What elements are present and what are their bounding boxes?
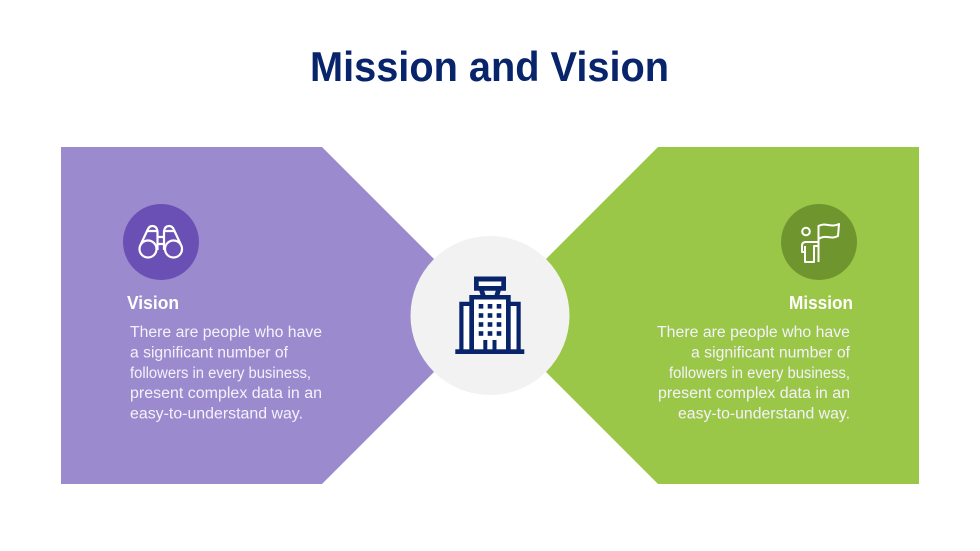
- text block: vision description: followers in every business,: [130, 365, 311, 382]
- panel: vision: [61, 147, 435, 484]
- center circle with building icon: [410, 236, 570, 395]
- text block: mission description: There are people who have: [657, 324, 850, 341]
- text block: vision description: easy-to-understand way.: [130, 406, 303, 422]
- panel: mission: [546, 147, 919, 484]
- title: Mission and Vision: [310, 43, 669, 90]
- text block: mission description: followers in every business,: [669, 365, 850, 382]
- text block: mission description: present complex data in an: [658, 385, 850, 402]
- text block: vision description: present complex data in an: [130, 385, 322, 402]
- icon: building: [455, 276, 524, 354]
- text block: vision description: a significant number of: [130, 344, 289, 362]
- text block: mission description: easy-to-understand way.: [678, 406, 850, 422]
- heading: vision: Vision: [127, 292, 179, 313]
- text block: vision description: [130, 324, 322, 422]
- heading: mission: Mission: [789, 292, 853, 313]
- icon: binoculars: [123, 204, 199, 280]
- icon: person with flag: [781, 204, 857, 280]
- text block: mission description: [657, 324, 851, 422]
- text block: mission description: a significant number of: [691, 344, 851, 362]
- text block: vision description: There are people who have: [130, 324, 322, 341]
